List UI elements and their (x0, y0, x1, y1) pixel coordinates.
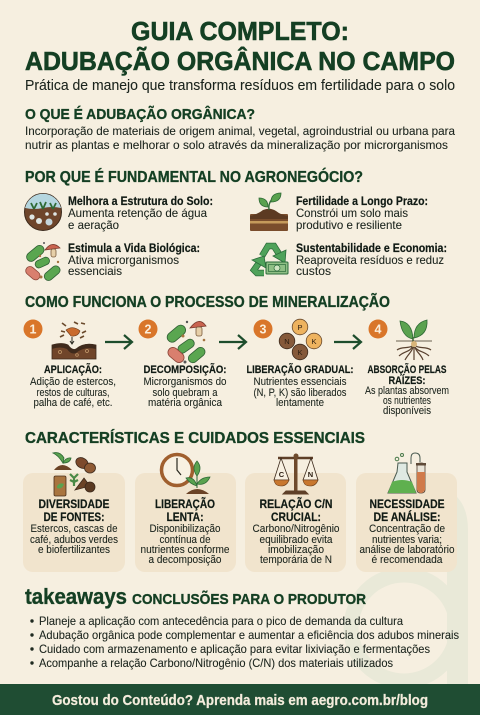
benefit: sustentabilidade: custos (296, 264, 331, 278)
icon: organic sources (53, 453, 96, 496)
card: liberação lenta (135, 454, 236, 572)
step 3 text: LIBERAÇÃO GRADUAL: (246, 363, 354, 376)
benefit: estrutura do solo (24, 194, 213, 232)
benefit: fertilidade (250, 193, 428, 232)
step 3 text: lentamente (276, 397, 324, 409)
card text: Estercos, cascas de (30, 523, 118, 535)
card: relação C/N (245, 454, 346, 572)
step 2 text: solo quebram a (152, 387, 218, 399)
takeaways list (30, 614, 459, 670)
benefit: estrutura do solo: e aeração (68, 218, 119, 232)
icon: lab flask and test tube (388, 453, 426, 493)
title: ADUBAÇÃO ORGÂNICA NO CAMPO (25, 46, 455, 76)
heading: como funciona: COMO FUNCIONA O PROCESSO DE MINERALIZAÇÃO (25, 293, 390, 311)
step 3 text: Nutrientes essenciais (254, 376, 347, 388)
icon: N P K nutrients: N (284, 337, 290, 346)
card text: a decomposição (148, 554, 222, 566)
icon: plant with roots (396, 320, 432, 360)
step number 3: 3 (260, 322, 267, 336)
icon: balance scale: C (279, 470, 285, 479)
icon: balance scale: N (308, 470, 313, 479)
step 1 text: APLICAÇÃO: (44, 363, 102, 376)
icon: soil cross-section (24, 194, 62, 230)
step 1 text: palha de café, etc. (34, 397, 112, 409)
benefit: vida biológica: Ativa microrganismos (68, 253, 179, 267)
step 2 text (144, 363, 226, 409)
icon: decomposition microbes (165, 321, 207, 365)
heading: características: CARACTERÍSTICAS E CUIDADOS ESSENCIAIS (25, 428, 365, 447)
subtitle: Prática de manejo que transforma resíduos em fertilidade para o solo (25, 78, 455, 94)
step 2 text: DECOMPOSIÇÃO: (144, 363, 226, 376)
icon: N P K nutrients (279, 319, 322, 360)
step 2 text: Microrganismos do (144, 376, 226, 388)
icon: N P K nutrients: K (297, 348, 303, 357)
card: necessidade de análise (356, 453, 457, 572)
arrow 2 (219, 335, 246, 349)
step 3 text: (N, P, K) são liberados (254, 387, 347, 399)
heading: takeaways: CONCLUSÕES PARA O PRODUTOR (132, 590, 366, 608)
arrow 3 (334, 335, 361, 349)
icon: microorganisms (24, 242, 62, 282)
icon: sprout on soil (250, 193, 288, 231)
step 4 text: As plantas absorvem (365, 385, 449, 397)
icon: clock and plant (162, 454, 210, 494)
card text: equilibrado evita (260, 534, 333, 546)
step number 2: 2 (145, 322, 152, 336)
step 3 (246, 319, 354, 409)
heading: por que: POR QUE É FUNDAMENTAL NO AGRONEGÓCIO? (25, 168, 363, 186)
card text: nutrientes conforme (140, 544, 230, 556)
benefit: sustentabilidade: Reaproveita resíduos e reduz (296, 253, 444, 267)
footer banner: Gostou do Conteúdo? Aprenda mais em aegro.com.br/blog (52, 692, 428, 709)
card text: imobilização (268, 544, 324, 556)
card text: RELAÇÃO C/N (260, 498, 332, 511)
benefit: estrutura do solo: Melhora a Estrutura do Solo: (68, 194, 213, 208)
step 3 text (246, 363, 354, 409)
benefit: vida biológica: essenciais (68, 264, 122, 278)
card text: LENTA: (166, 512, 204, 524)
step 2 (138, 320, 226, 409)
takeaways list: Adubação orgânica pode complementar e aumentar a eficiência dos adubos minerais (39, 628, 459, 642)
step 4 text: ABSORÇÃO PELAS (368, 363, 446, 376)
icon: N P K nutrients: P (297, 323, 303, 332)
benefit: vida biológica: Estimula a Vida Biológica: (68, 241, 200, 255)
card text (30, 499, 118, 556)
card text: NECESSIDADE (370, 499, 445, 511)
step 2 text: matéria orgânica (148, 397, 223, 409)
card text: temporária de N (260, 554, 332, 566)
card text: DE FONTES: (44, 512, 104, 524)
footer banner (0, 684, 480, 715)
icon: N P K nutrients: K (311, 337, 317, 346)
card text: Carbono/Nitrogênio (252, 523, 340, 535)
card text: CRUCIAL: (271, 512, 321, 524)
card text: DE ANÁLISE: (374, 511, 440, 524)
arrow 1 (105, 335, 132, 349)
step 4 text: disponíveis (383, 405, 431, 417)
benefit: estrutura do solo: Aumenta retenção de água (68, 206, 207, 220)
benefit: sustentabilidade (252, 241, 447, 278)
definition text: Incorporação de materiais de origem animal, vegetal, agroindustrial ou urbana para (25, 124, 455, 138)
card text: contínua de (160, 534, 210, 546)
benefit: sustentabilidade: Sustentabilidade e Economia: (296, 241, 447, 255)
step 1 (24, 320, 116, 409)
icon: recycling and money (252, 246, 288, 274)
card text (140, 498, 230, 566)
step 1 text: Adição de estercos, (30, 376, 116, 388)
heading: o que é: O QUE É ADUBAÇÃO ORGÂNICA? (25, 105, 255, 123)
takeaways list: Cuidado com armazenamento e aplicação para evitar lixiviação e fermentações (39, 642, 430, 656)
definition text: nutrir as plantas e melhorar o solo através da mineralização por microrganismos (25, 138, 448, 152)
card text: DIVERSIDADE (38, 499, 110, 511)
title: GUIA COMPLETO: (131, 18, 349, 46)
heading: takeaways: takeaways (25, 584, 127, 609)
step number 4: 4 (375, 322, 382, 336)
step 1 text: restos de culturas, (36, 387, 110, 399)
step 4 text: RAÍZES: (388, 374, 426, 387)
step number 1: 1 (30, 322, 37, 336)
step 4 text: os nutrientes (383, 395, 431, 407)
heading: takeaways (25, 584, 366, 609)
card text: nutrientes varia; (372, 534, 442, 546)
card text (252, 498, 340, 566)
card text: Concentração de (369, 523, 445, 535)
card text (360, 499, 454, 566)
benefit: fertilidade: Fertilidade a Longo Prazo: (296, 194, 428, 208)
step 4 text (365, 363, 449, 417)
watermark: large letter a (351, 490, 468, 684)
step 4 (365, 320, 449, 417)
card text: Disponibilização (150, 523, 220, 535)
card text: e biofertilizantes (38, 544, 110, 556)
card text: LIBERAÇÃO (155, 498, 215, 511)
benefit: fertilidade: Constrói um solo mais (296, 206, 408, 220)
benefit: vida biológica (24, 241, 200, 282)
takeaways list: Planeje a aplicação com antecedência para o pico de demanda da cultura (39, 614, 403, 628)
icon: balance scale (274, 454, 318, 494)
title (25, 18, 455, 76)
card text: análise de laboratório (360, 544, 454, 556)
card text: café, adubos verdes (30, 534, 118, 546)
definition text (25, 124, 455, 152)
benefit: fertilidade: produtivo e resiliente (296, 218, 402, 232)
card text: é recomendada (372, 554, 443, 566)
card: diversidade (23, 453, 125, 572)
step 1 text (30, 363, 116, 409)
takeaways list: Acompanhe a relação Carbono/Nitrogênio (C/N) dos materiais utilizados (39, 656, 393, 670)
icon: application to soil (52, 322, 96, 359)
